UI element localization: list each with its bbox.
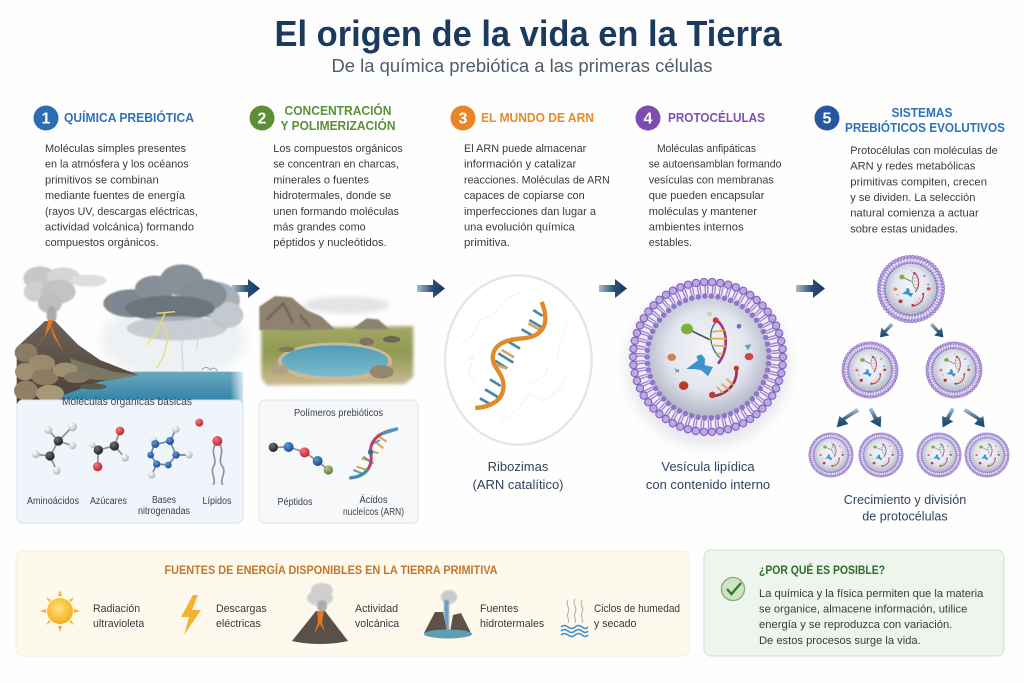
caption: ribozymes xyxy=(472,459,564,492)
polymer captions: Péptidos xyxy=(278,497,312,508)
step 4 text: Moléculas anfipáticas xyxy=(657,143,756,155)
step 1 text: actividad volcánica) formando xyxy=(45,222,194,234)
step 2 text: hidrotermales, donde se xyxy=(273,190,391,202)
molecule: nucleic acid xyxy=(349,429,397,478)
caption: growth and division: de protocélulas xyxy=(862,510,948,524)
coastal rocks xyxy=(14,343,138,402)
molecule captions xyxy=(27,495,232,517)
caption: growth and division xyxy=(844,493,966,524)
step 1 text: compuestos orgánicos. xyxy=(45,237,159,249)
step 4 header: 4 xyxy=(644,110,653,128)
division arrows xyxy=(837,323,985,427)
step 4 text: estables. xyxy=(649,237,692,249)
step 3 header: 3 xyxy=(459,110,468,128)
panel text: se organice, almacene información, utilice xyxy=(759,604,967,616)
step 2 header: Y POLIMERIZACIÓN xyxy=(280,118,396,133)
label: electric discharges: Descargas xyxy=(216,603,267,615)
molecule: amino acid xyxy=(32,423,77,475)
polymer captions: Ácidos xyxy=(360,493,388,506)
panel text: De estos procesos surge la vida. xyxy=(759,635,921,647)
panel heading: ¿POR QUÉ ES POSIBLE? xyxy=(759,562,885,577)
polymer captions: nucleícos (ARN) xyxy=(343,507,404,518)
clouds xyxy=(303,297,390,313)
step 3 text: imperfecciones dan lugar a xyxy=(464,206,597,218)
protocell generation 1 xyxy=(877,255,945,323)
step 4 text: que pueden encapsular xyxy=(649,190,765,202)
icon: sun xyxy=(40,590,80,632)
arrow: step 2 to 3 xyxy=(417,279,445,298)
panel: prebiotic polymers xyxy=(259,400,418,523)
step 2 text: más grandes como xyxy=(273,222,366,234)
step 1 header: 1 xyxy=(42,110,51,128)
step 1 text: primitivos se combinan xyxy=(45,174,159,186)
label: ultraviolet: Radiación xyxy=(93,603,140,615)
icon: hydrothermal vent xyxy=(424,590,472,638)
step 4 text: ambientes internos xyxy=(649,222,744,234)
diagram: protocell growth and division xyxy=(809,255,1009,477)
step 4 header: PROTOCÉLULAS xyxy=(668,110,765,125)
distant structure xyxy=(202,367,217,372)
step 4 text: vesículas con membranas xyxy=(649,174,774,186)
step 1 text: en la atmósfera y los océanos xyxy=(45,159,189,171)
molecule captions: Azúcares xyxy=(90,496,127,507)
step 2 text: Los compuestos orgánicos xyxy=(273,143,403,155)
step 2 header: CONCENTRACIÓN xyxy=(284,103,392,118)
step 5 text: primitivas compiten, crecen xyxy=(850,176,987,188)
polymer captions xyxy=(278,493,404,518)
caption: ribozymes: Ribozimas xyxy=(488,459,549,474)
label: ultraviolet: ultravioleta xyxy=(93,618,144,630)
icon: lightning xyxy=(181,595,201,635)
arrow: step 3 to 4 xyxy=(599,279,627,298)
label: hydrothermal sources xyxy=(480,603,544,630)
step 5 text: ARN y redes metabólicas xyxy=(850,161,976,173)
molecule captions: nitrogenadas xyxy=(138,506,190,517)
label: electric discharges: eléctricas xyxy=(216,618,261,630)
label: humidity cycles xyxy=(594,603,680,630)
step 1 text: (rayos UV, descargas eléctricas, xyxy=(45,206,198,218)
lightning xyxy=(147,312,175,368)
molecule captions: Aminoácidos xyxy=(27,496,79,507)
step 3 text: reacciones. Moléculas de ARN xyxy=(464,174,610,186)
step 5 header: PREBIÓTICOS EVOLUTIVOS xyxy=(845,120,1005,135)
pond water xyxy=(278,342,392,381)
panel heading: Polímeros prebióticos xyxy=(294,408,383,419)
label: humidity cycles: Ciclos de humedad xyxy=(594,603,680,615)
caption: ribozymes: (ARN catalítico) xyxy=(472,477,564,492)
step 5 header: 5 xyxy=(823,110,832,128)
caption: lipid vesicle xyxy=(646,459,770,492)
title: El origen de la vida en la Tierra xyxy=(274,13,782,54)
panel heading: Moléculas orgánicas básicas xyxy=(62,396,192,408)
step 2 text: se concentran en charcas, xyxy=(273,159,399,171)
faint background strands xyxy=(460,292,568,423)
step 2 text xyxy=(273,143,403,249)
step 5 text: Protocélulas con moléculas de xyxy=(850,145,998,157)
step 3 text: una evolución química xyxy=(464,222,575,234)
rocks xyxy=(370,365,394,378)
molecule: lipid xyxy=(195,419,224,485)
panel text: La química y la física permiten que la materia xyxy=(759,588,984,600)
molecule: nitrogen base xyxy=(147,426,193,479)
label: ultraviolet xyxy=(93,603,144,630)
step 2 header xyxy=(250,103,396,133)
ribozyme enclosure xyxy=(445,275,592,445)
step 3 text xyxy=(464,143,610,249)
caption: lipid vesicle: con contenido interno xyxy=(646,477,770,492)
label: volcanic activity: Actividad xyxy=(355,603,398,615)
step 5 text: natural comienza a actuar xyxy=(850,208,979,220)
molecule: sugar xyxy=(90,427,129,471)
step 5 text: y se dividen. La selección xyxy=(850,192,975,204)
arrow: step 1 to 2 xyxy=(232,279,260,298)
label: electric discharges xyxy=(216,603,267,630)
step 5 text xyxy=(850,145,998,235)
panel: energy sources xyxy=(16,551,689,656)
label: volcanic activity xyxy=(355,603,399,630)
label: humidity cycles: y secado xyxy=(594,618,637,630)
label: volcanic activity: volcánica xyxy=(355,618,399,630)
step 2 text: péptidos y nucleótidos. xyxy=(273,237,387,249)
land xyxy=(261,326,413,385)
subtitle: De la química prebiótica a las primeras células xyxy=(332,56,712,76)
icon: wet and dry cycles xyxy=(561,599,588,636)
RNA backbone xyxy=(475,302,545,408)
step 1 header: QUÍMICA PREBIÓTICA xyxy=(64,110,194,125)
icon: volcano xyxy=(292,583,348,644)
step 3 text: primitiva. xyxy=(464,237,510,249)
step 2 header: 2 xyxy=(258,110,267,128)
panel: basic organic molecules xyxy=(17,396,243,523)
smoke plume xyxy=(23,266,107,324)
step 3 text: El ARN puede almacenar xyxy=(464,143,587,155)
step 3 text: capaces de copiarse con xyxy=(464,190,585,202)
step 5 header: SISTEMAS xyxy=(892,106,952,120)
illustration: pond with concentrated compounds xyxy=(259,296,413,385)
panel heading: FUENTES DE ENERGÍA DISPONIBLES EN LA TIERRA PRIMITIVA xyxy=(164,564,498,577)
step 5 header xyxy=(814,106,1005,135)
illustration: ribozyme RNA xyxy=(445,275,592,445)
step 4 text: moléculas y mantener xyxy=(649,206,757,218)
sky haze xyxy=(100,300,247,380)
volcano xyxy=(17,321,138,404)
sea xyxy=(57,372,243,404)
panel text xyxy=(759,588,984,647)
step 3 text: información y catalizar xyxy=(464,159,577,171)
step 3 header: EL MUNDO DE ARN xyxy=(481,111,594,125)
caption: growth and division: Crecimiento y división xyxy=(844,493,966,507)
step 3 header xyxy=(450,106,594,130)
storm cloud xyxy=(103,264,243,340)
caption: lipid vesicle: Vesícula lipídica xyxy=(661,459,755,474)
protocell generation 3 xyxy=(809,433,1009,477)
label: hydrothermal sources: Fuentes xyxy=(480,603,518,615)
molecule: peptide chain xyxy=(269,442,333,475)
illustration: primitive Earth volcano, storm and ocean xyxy=(14,264,247,405)
step 4 text: se autoensamblan formando xyxy=(649,159,781,171)
step 2 text: minerales o fuentes xyxy=(273,174,369,186)
step 2 text: unen formando moléculas xyxy=(273,206,399,218)
icon: check mark xyxy=(722,578,744,600)
step 1 text xyxy=(45,143,198,249)
step 1 text: Moléculas simples presentes xyxy=(45,143,186,155)
molecule captions: Bases xyxy=(152,495,176,506)
arrow: step 4 to 5 xyxy=(796,279,825,298)
RNA rungs xyxy=(480,310,543,405)
step 1 header xyxy=(34,106,194,130)
panel text: energía y se reproduzca con variación. xyxy=(759,619,952,631)
molecule captions: Lípidos xyxy=(202,496,232,507)
illustration: lipid vesicle xyxy=(628,278,788,445)
step 4 text xyxy=(649,143,781,249)
step 5 text: sobre estas unidades. xyxy=(850,223,958,235)
step 4 header xyxy=(636,106,765,130)
panel: why it is possible xyxy=(704,550,1004,656)
step 1 text: mediante fuentes de energía xyxy=(45,190,186,202)
molecules xyxy=(32,419,224,485)
mountains xyxy=(259,296,335,331)
protocell generation 2 xyxy=(842,342,982,398)
label: hydrothermal sources: hidrotermales xyxy=(480,618,544,630)
